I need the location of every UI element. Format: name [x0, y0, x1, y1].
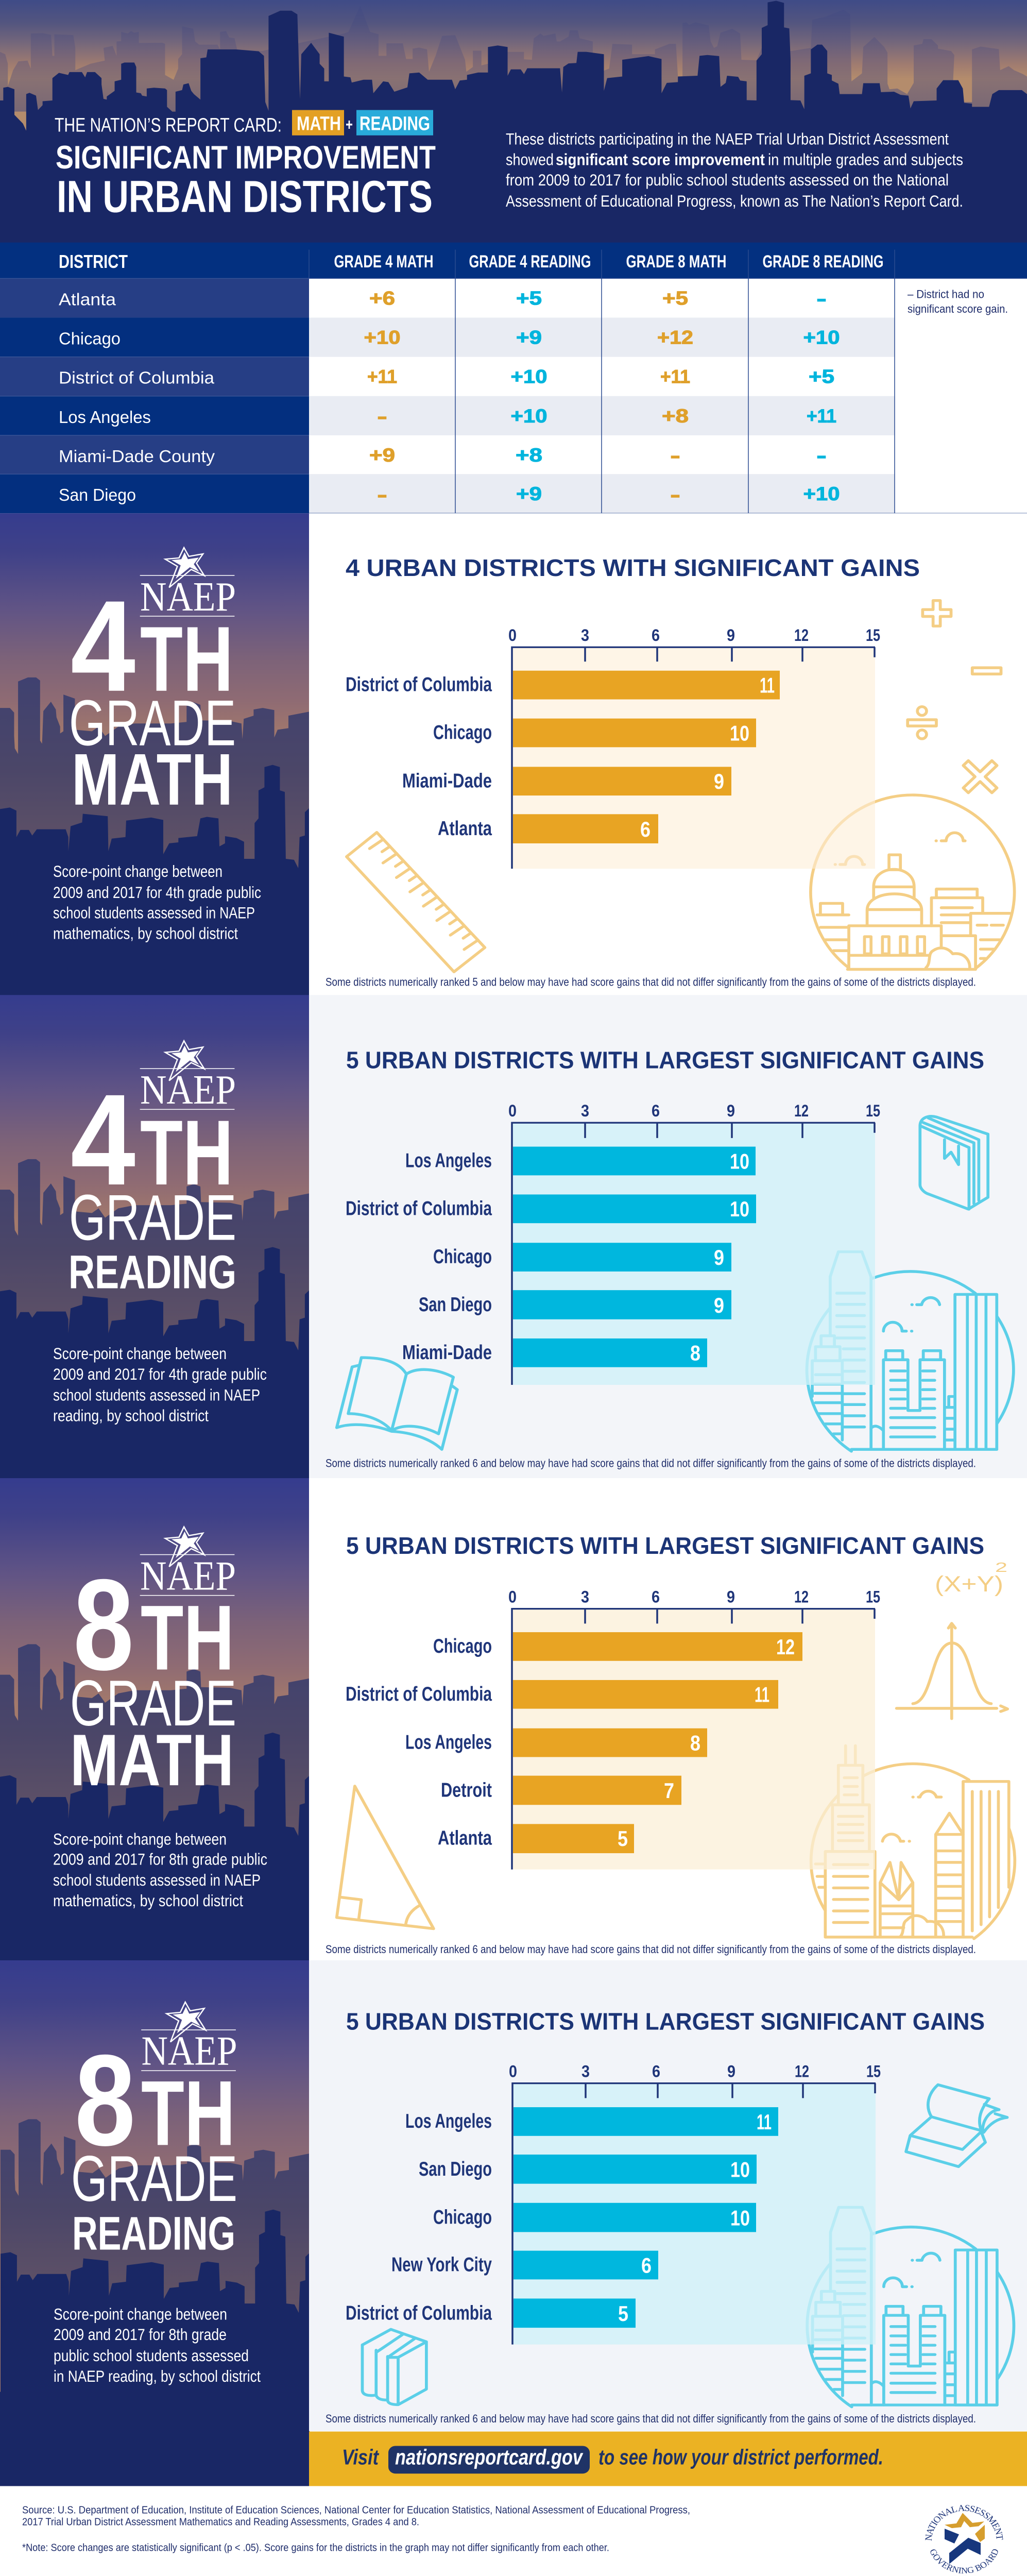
grade 4 math values: +6	[369, 288, 395, 309]
grade 8 math values	[657, 288, 693, 506]
bar chart: 6	[652, 626, 660, 645]
bar chart: 9	[714, 1246, 724, 1270]
header title block: IN URBAN DISTRICTS	[57, 172, 433, 222]
description: mathematics, by school district	[53, 924, 238, 942]
grade 8 math values: –	[671, 445, 680, 467]
4th grade reading chart panel	[309, 995, 1027, 1478]
description: Score-point change between	[53, 1829, 227, 1848]
grade 4 reading values: +9	[516, 327, 542, 348]
bar chart: 9	[714, 1294, 724, 1317]
grade 8 math values: +5	[662, 288, 688, 309]
bar chart: District of Columbia	[346, 2301, 492, 2324]
description: 2009 and 2017 for 4th grade public	[53, 1365, 267, 1383]
source and notes	[22, 2504, 690, 2554]
source and notes: 2017 Trial Urban District Assessment Mathematics and Reading Assessments, Grades 4 and 8.	[22, 2516, 419, 2528]
bar chart: 12	[794, 1101, 809, 1121]
description	[53, 1344, 267, 1425]
bar chart: 11	[755, 1683, 769, 1707]
NAEP logo	[141, 2002, 237, 2074]
description: reading, by school district	[53, 1406, 209, 1425]
bar chart: District of Columbia	[346, 673, 492, 696]
bar chart: 6	[652, 1101, 660, 1121]
bar chart: 6	[640, 818, 651, 842]
icon: open book	[337, 1358, 457, 1449]
NAEP logo: NAEP	[141, 2028, 237, 2074]
bar chart: Miami-Dade	[402, 1341, 492, 1364]
table legend note	[908, 287, 1008, 315]
8th grade math sidebar	[0, 1478, 309, 1977]
header title block: READING	[360, 113, 430, 134]
grade 8 reading values: –	[817, 445, 826, 467]
grade 4 math values: +9	[369, 445, 395, 466]
bar chart: 12	[776, 1635, 795, 1659]
header intro paragraph: significant score improvement	[556, 150, 765, 168]
icon: stacked books	[362, 2329, 426, 2404]
icon: formula: 2	[995, 1560, 1007, 1575]
grade 4 math values: +10	[364, 327, 401, 348]
description	[53, 862, 261, 942]
header title block: SIGNIFICANT IMPROVEMENT	[56, 139, 436, 175]
grade heading: GRADE	[71, 2143, 237, 2215]
header title block	[55, 110, 436, 222]
8th grade math chart panel	[309, 1478, 1027, 1960]
bar chart: District of Columbia	[346, 1197, 492, 1219]
description: 2009 and 2017 for 8th grade	[54, 2325, 227, 2344]
call to action banner: to see how your district performed.	[598, 2446, 883, 2469]
district names: Atlanta	[59, 291, 116, 309]
description: in NAEP reading, by school district	[54, 2367, 261, 2385]
bar chart: 0	[508, 626, 517, 645]
grade heading: TH	[140, 1101, 233, 1204]
bar chart: 3	[581, 1588, 589, 1606]
header intro paragraph: in multiple grades and subjects	[768, 150, 963, 168]
table header row	[0, 243, 1027, 278]
bar chart: 6	[652, 2062, 660, 2081]
table header row: GRADE 8 MATH	[626, 251, 727, 272]
grade heading: MATH	[72, 739, 233, 821]
NAEP logo	[140, 1041, 236, 1113]
description	[53, 1829, 267, 1910]
icon: formula: (X+Y)	[935, 1572, 1003, 1597]
bar chart: 0	[509, 2062, 517, 2081]
bar chart: 3	[581, 1101, 589, 1121]
icon: formula	[935, 1560, 1007, 1597]
icon: bell curve	[897, 1623, 1007, 1719]
grade 4 reading values: +10	[511, 405, 547, 427]
grade heading	[71, 2028, 237, 2260]
district names: San Diego	[59, 486, 136, 505]
table legend note: – District had no	[908, 287, 984, 300]
4th grade math sidebar	[0, 513, 309, 1010]
logo: National Assessment Governing Board seal	[925, 2505, 1003, 2573]
grade heading: READING	[69, 1246, 236, 1299]
panel: 4th grade reading	[0, 995, 1027, 1492]
bar chart: Chicago	[433, 1245, 492, 1268]
district names	[59, 291, 215, 505]
bar chart: 12	[794, 626, 809, 645]
header title block: THE NATION’S REPORT CARD:	[55, 114, 282, 136]
header intro paragraph	[506, 130, 963, 210]
district names: Miami-Dade County	[59, 447, 215, 466]
description: 2009 and 2017 for 8th grade public	[53, 1850, 267, 1868]
grade 4 reading values	[511, 288, 547, 505]
grade 4 reading values: +5	[516, 288, 542, 309]
bar chart	[346, 1588, 880, 1870]
grade 4 math values: –	[378, 406, 387, 427]
bar chart: New York City	[391, 2253, 492, 2276]
description: mathematics, by school district	[53, 1891, 243, 1910]
panel: 8th grade math	[0, 1478, 1027, 1977]
grade 8 reading values: +5	[809, 366, 834, 387]
NAEP logo: NAEP	[140, 574, 236, 620]
bar chart	[346, 1101, 880, 1385]
grade heading: TH	[141, 1586, 234, 1689]
grade heading	[69, 1067, 236, 1299]
bar chart: 9	[727, 2062, 735, 2081]
grade 4 reading values: +8	[516, 445, 542, 466]
table row backgrounds	[0, 278, 1027, 513]
bar chart: Atlanta	[438, 1826, 492, 1849]
title: 4 URBAN DISTRICTS WITH SIGNIFICANT GAINS	[346, 555, 920, 582]
bar chart: 6	[641, 2254, 652, 2278]
bar chart: 0	[508, 1101, 517, 1121]
grade heading: MATH	[70, 1719, 234, 1801]
grade 8 math values: +11	[660, 366, 690, 387]
table header row: GRADE 4 READING	[469, 251, 591, 272]
description	[54, 2304, 261, 2385]
icon: chicago skyline	[811, 1745, 1015, 1939]
bar chart: Detroit	[441, 1778, 492, 1801]
bar chart: 12	[795, 2062, 809, 2081]
bar chart: 8	[690, 1342, 700, 1365]
icon: closed book	[920, 1116, 988, 1209]
grade heading: 8	[75, 2028, 135, 2173]
bar chart: Miami-Dade	[402, 769, 492, 792]
description: school students assessed in NAEP	[53, 904, 255, 922]
score table	[0, 243, 1027, 513]
table legend note: significant score gain.	[908, 302, 1008, 315]
8th grade reading chart panel	[309, 1960, 1027, 2431]
bar chart: 10	[730, 1198, 749, 1222]
grade heading: READING	[72, 2208, 235, 2260]
bar chart: 12	[794, 1588, 809, 1606]
grade heading: TH	[141, 2062, 235, 2165]
grade 4 math values: +11	[367, 366, 397, 387]
grade 8 reading values: +11	[807, 405, 836, 427]
bar chart: 6	[652, 1588, 660, 1606]
logo: National Assessment Governing Board seal: NATIONAL ASSESSMENT	[925, 2505, 1003, 2541]
bar chart: Atlanta	[438, 817, 492, 840]
bar chart: 11	[760, 674, 775, 698]
grade heading: GRADE	[70, 1667, 236, 1739]
bar chart: Los Angeles	[405, 2109, 492, 2132]
grade 8 reading values: +10	[803, 483, 840, 505]
table header row: GRADE 8 READING	[762, 251, 883, 272]
description: Score-point change between	[53, 1344, 227, 1363]
icon: city skyline	[807, 2207, 1014, 2407]
bar chart: 15	[866, 1101, 880, 1121]
NAEP logo	[140, 548, 236, 620]
icon: ruler	[347, 833, 485, 972]
panel: 8th grade reading	[0, 1960, 1027, 2486]
grade 4 math values	[364, 288, 401, 506]
NAEP logo	[140, 1527, 236, 1599]
bar chart: Chicago	[433, 1634, 492, 1657]
icon: city skyline	[807, 1252, 1014, 1451]
bar chart: Chicago	[433, 721, 492, 743]
grade 8 math values: +8	[662, 405, 689, 427]
call to action banner: Visit	[342, 2446, 379, 2469]
district names: Chicago	[59, 330, 121, 348]
NAEP logo: NAEP	[140, 1553, 236, 1599]
grade 4 math values: –	[378, 484, 387, 506]
header intro paragraph: showed	[506, 150, 554, 168]
4th grade reading sidebar	[0, 995, 309, 1492]
description: Score-point change between	[53, 862, 222, 880]
bar chart: 15	[866, 1588, 880, 1606]
description: school students assessed in NAEP	[53, 1871, 261, 1889]
bar chart: 9	[714, 770, 724, 794]
bar chart: 3	[581, 626, 589, 645]
bar chart: Chicago	[433, 2206, 492, 2228]
bar chart: 10	[730, 722, 749, 745]
icon: math symbols	[908, 601, 1009, 804]
4th grade math chart panel	[309, 513, 1027, 995]
bar chart: 10	[730, 2158, 750, 2182]
bar chart: 15	[866, 2062, 881, 2081]
logo: National Assessment Governing Board seal: GOVERNING BOARD	[930, 2549, 998, 2573]
description: Score-point change between	[54, 2304, 227, 2323]
description: school students assessed in NAEP	[53, 1386, 260, 1404]
bar chart	[346, 626, 880, 869]
bar chart: 9	[727, 1101, 735, 1121]
call to action banner: nationsreportcard.gov	[395, 2446, 584, 2469]
description: public school students assessed	[54, 2346, 249, 2365]
bar chart: 10	[730, 2207, 750, 2230]
bar chart: 11	[757, 2110, 772, 2134]
header title block: MATH	[297, 113, 341, 134]
bar chart: 0	[508, 1588, 517, 1606]
district names: District of Columbia	[59, 369, 215, 387]
district names: Los Angeles	[59, 408, 151, 427]
bar chart: 15	[866, 626, 880, 645]
table header row: DISTRICT	[59, 251, 128, 272]
table header row: GRADE 4 MATH	[334, 251, 433, 272]
grade heading: TH	[140, 607, 233, 710]
bar chart: District of Columbia	[346, 1682, 492, 1705]
grade heading: 8	[73, 1552, 134, 1697]
description: 2009 and 2017 for 4th grade public	[53, 883, 261, 902]
bar chart: 8	[690, 1732, 700, 1755]
header title block: +	[346, 115, 353, 133]
grade heading: GRADE	[69, 1181, 236, 1254]
call to action banner	[309, 2432, 1027, 2486]
grade heading: GRADE	[69, 687, 236, 759]
source and notes: *Note: Score changes are statistically significant (p < .05). Score gains for the districts in the graph may not differ significantly from each other.	[22, 2542, 609, 2554]
grade 8 reading values: –	[817, 289, 826, 310]
grade heading: 4	[71, 1067, 136, 1212]
bar chart: San Diego	[419, 1293, 492, 1316]
bar chart: 3	[581, 2062, 590, 2081]
header skyline silhouettes	[0, 1, 1027, 249]
icon: turning-page book	[906, 2084, 1007, 2166]
source and notes: Source: U.S. Department of Education, Institute of Education Sciences, National Center for Education Statistics, National Assessment of Educational Progress,	[22, 2504, 690, 2516]
icon: triangle	[337, 1786, 434, 1929]
grade 8 math values: –	[671, 484, 680, 506]
NAEP logo: NAEP	[140, 1067, 236, 1113]
8th grade reading sidebar	[0, 1960, 310, 2486]
grade 8 reading values: +10	[803, 327, 840, 348]
grade 4 reading values: +10	[511, 366, 547, 387]
grade heading: 4	[71, 574, 136, 719]
panel: 4th grade math	[0, 513, 1027, 1010]
bar chart: 9	[727, 1588, 735, 1606]
grade 8 reading values	[803, 289, 840, 505]
bar chart: San Diego	[419, 2157, 492, 2180]
bar chart: Los Angeles	[405, 1731, 492, 1753]
grade 8 math values: +12	[657, 327, 693, 348]
icon: capitol city	[811, 795, 1015, 970]
grade heading	[69, 574, 236, 821]
bar chart: 7	[664, 1780, 674, 1803]
bar chart: 9	[727, 626, 735, 645]
bar chart: 5	[618, 1827, 628, 1851]
bar chart: 5	[618, 2302, 628, 2326]
header banner	[0, 0, 1027, 249]
grade heading	[70, 1552, 236, 1801]
bar chart: 10	[730, 1150, 749, 1174]
grade 4 reading values: +9	[516, 483, 542, 505]
bar chart	[346, 2062, 881, 2345]
bar chart: Los Angeles	[405, 1149, 492, 1172]
